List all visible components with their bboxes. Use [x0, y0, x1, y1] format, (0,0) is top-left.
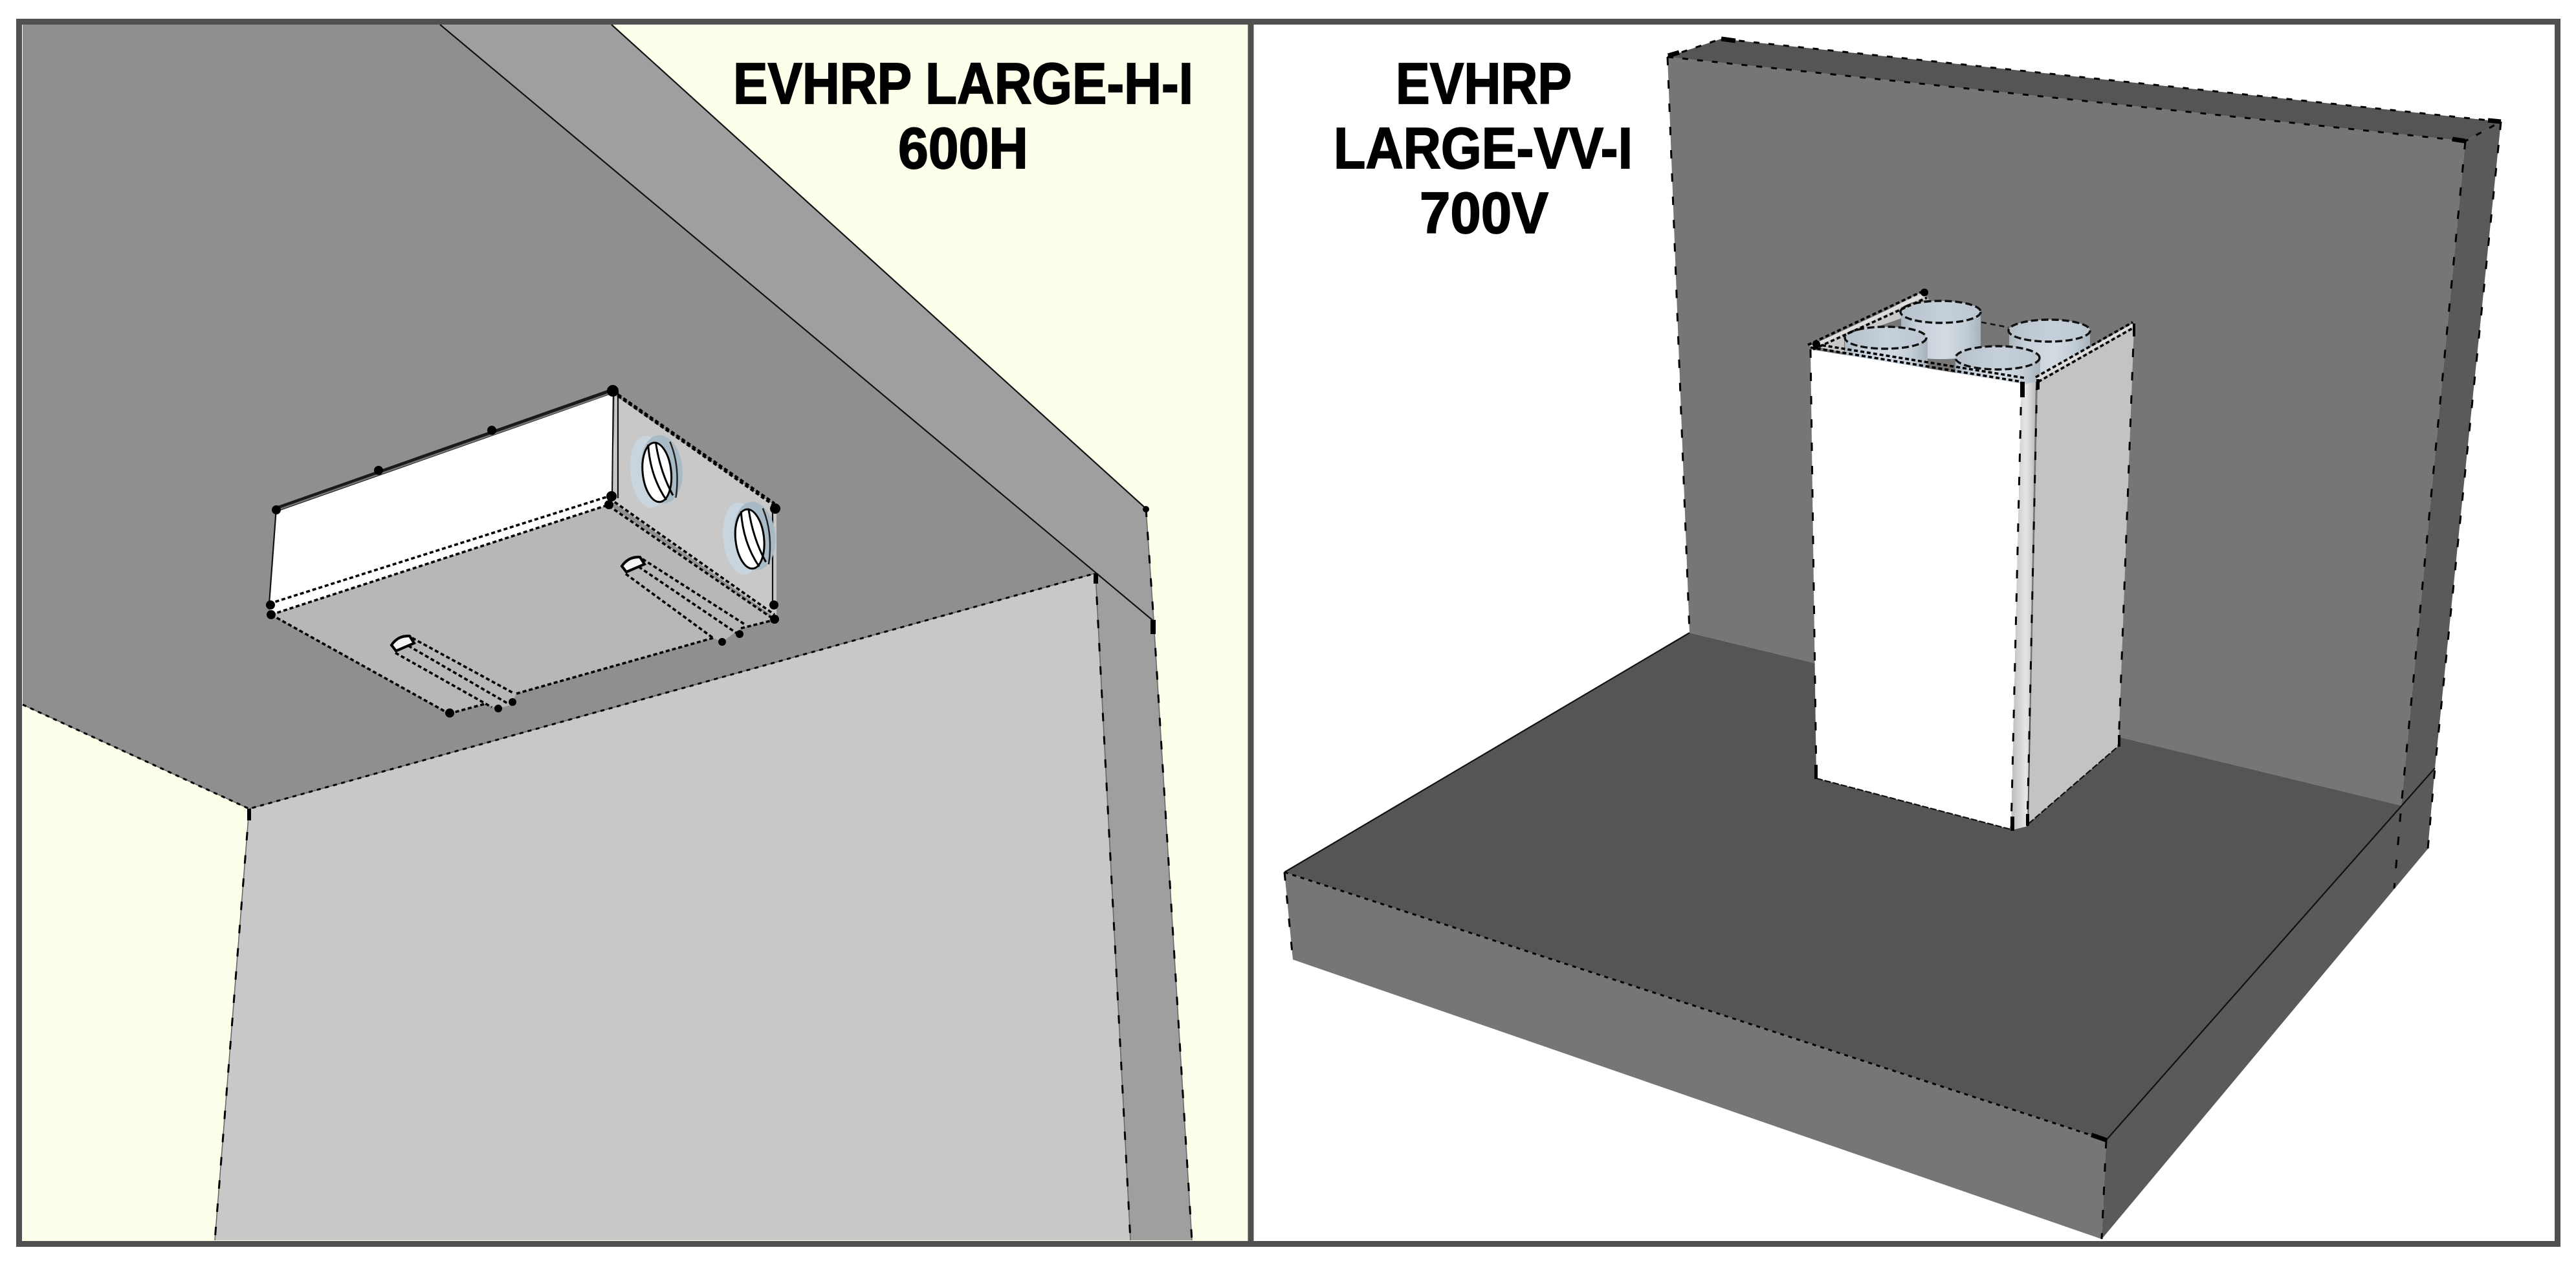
- mounting slot near: [391, 636, 516, 718]
- floor slab front side: [1284, 872, 2106, 1239]
- panel background: [23, 25, 1248, 1241]
- back wall top face: [1668, 39, 2501, 141]
- unit white front face: [1811, 349, 2021, 829]
- label: EVHRP LARGE-H-I 600H: 600H: [898, 116, 1028, 181]
- label: EVHRP LARGE-VV-I 700V: [1334, 52, 1633, 246]
- ceiling surface: [23, 25, 1095, 809]
- label: EVHRP LARGE-VV-I 700V: LARGE-VV-I: [1334, 116, 1633, 181]
- back wall side face: [2401, 122, 2501, 806]
- floor slab right side: [2102, 768, 2435, 1239]
- room edge lines: [1284, 39, 2501, 1239]
- floor surface: [1284, 633, 2401, 1140]
- front wall: [215, 573, 1130, 1240]
- label: EVHRP LARGE-VV-I 700V: 700V: [1420, 181, 1548, 246]
- unit right side face: [2029, 325, 2134, 824]
- unit corner strip: [2011, 382, 2036, 829]
- unit bottom face with mounting feet: [271, 505, 775, 714]
- label: EVHRP LARGE-VV-I 700V: EVHRP: [1396, 52, 1572, 116]
- label: EVHRP LARGE-H-I 600H: [733, 52, 1193, 181]
- unit edge lines: [1808, 289, 2135, 831]
- duct collar far: [720, 499, 779, 577]
- duct front right: [1955, 346, 2040, 388]
- duct collar near: [626, 432, 687, 510]
- unit edge lines: [266, 385, 780, 714]
- wall side strip: [1095, 573, 1192, 1240]
- ceiling beam: [440, 25, 1154, 621]
- horizontal unit: [266, 385, 780, 718]
- label: EVHRP LARGE-H-I 600H: EVHRP LARGE-H-I: [733, 52, 1193, 116]
- vertical unit: [1808, 289, 2135, 831]
- unit top rear panel: [1817, 291, 1929, 353]
- unit white front face: [269, 390, 615, 615]
- duct front left: [1845, 327, 1928, 369]
- duct back right: [2009, 320, 2090, 379]
- panel: left, ceiling-mounted EVHRP LARGE-H-I 600H: [23, 25, 1248, 1241]
- panel: right, floor-standing EVHRP LARGE-VV-I 700V: [1284, 39, 2501, 1239]
- mounting slot far: [622, 557, 745, 646]
- unit right end face: [613, 395, 776, 619]
- back wall face: [1668, 57, 2465, 806]
- room edge lines: [23, 25, 1192, 1240]
- duct back left: [1900, 301, 1981, 359]
